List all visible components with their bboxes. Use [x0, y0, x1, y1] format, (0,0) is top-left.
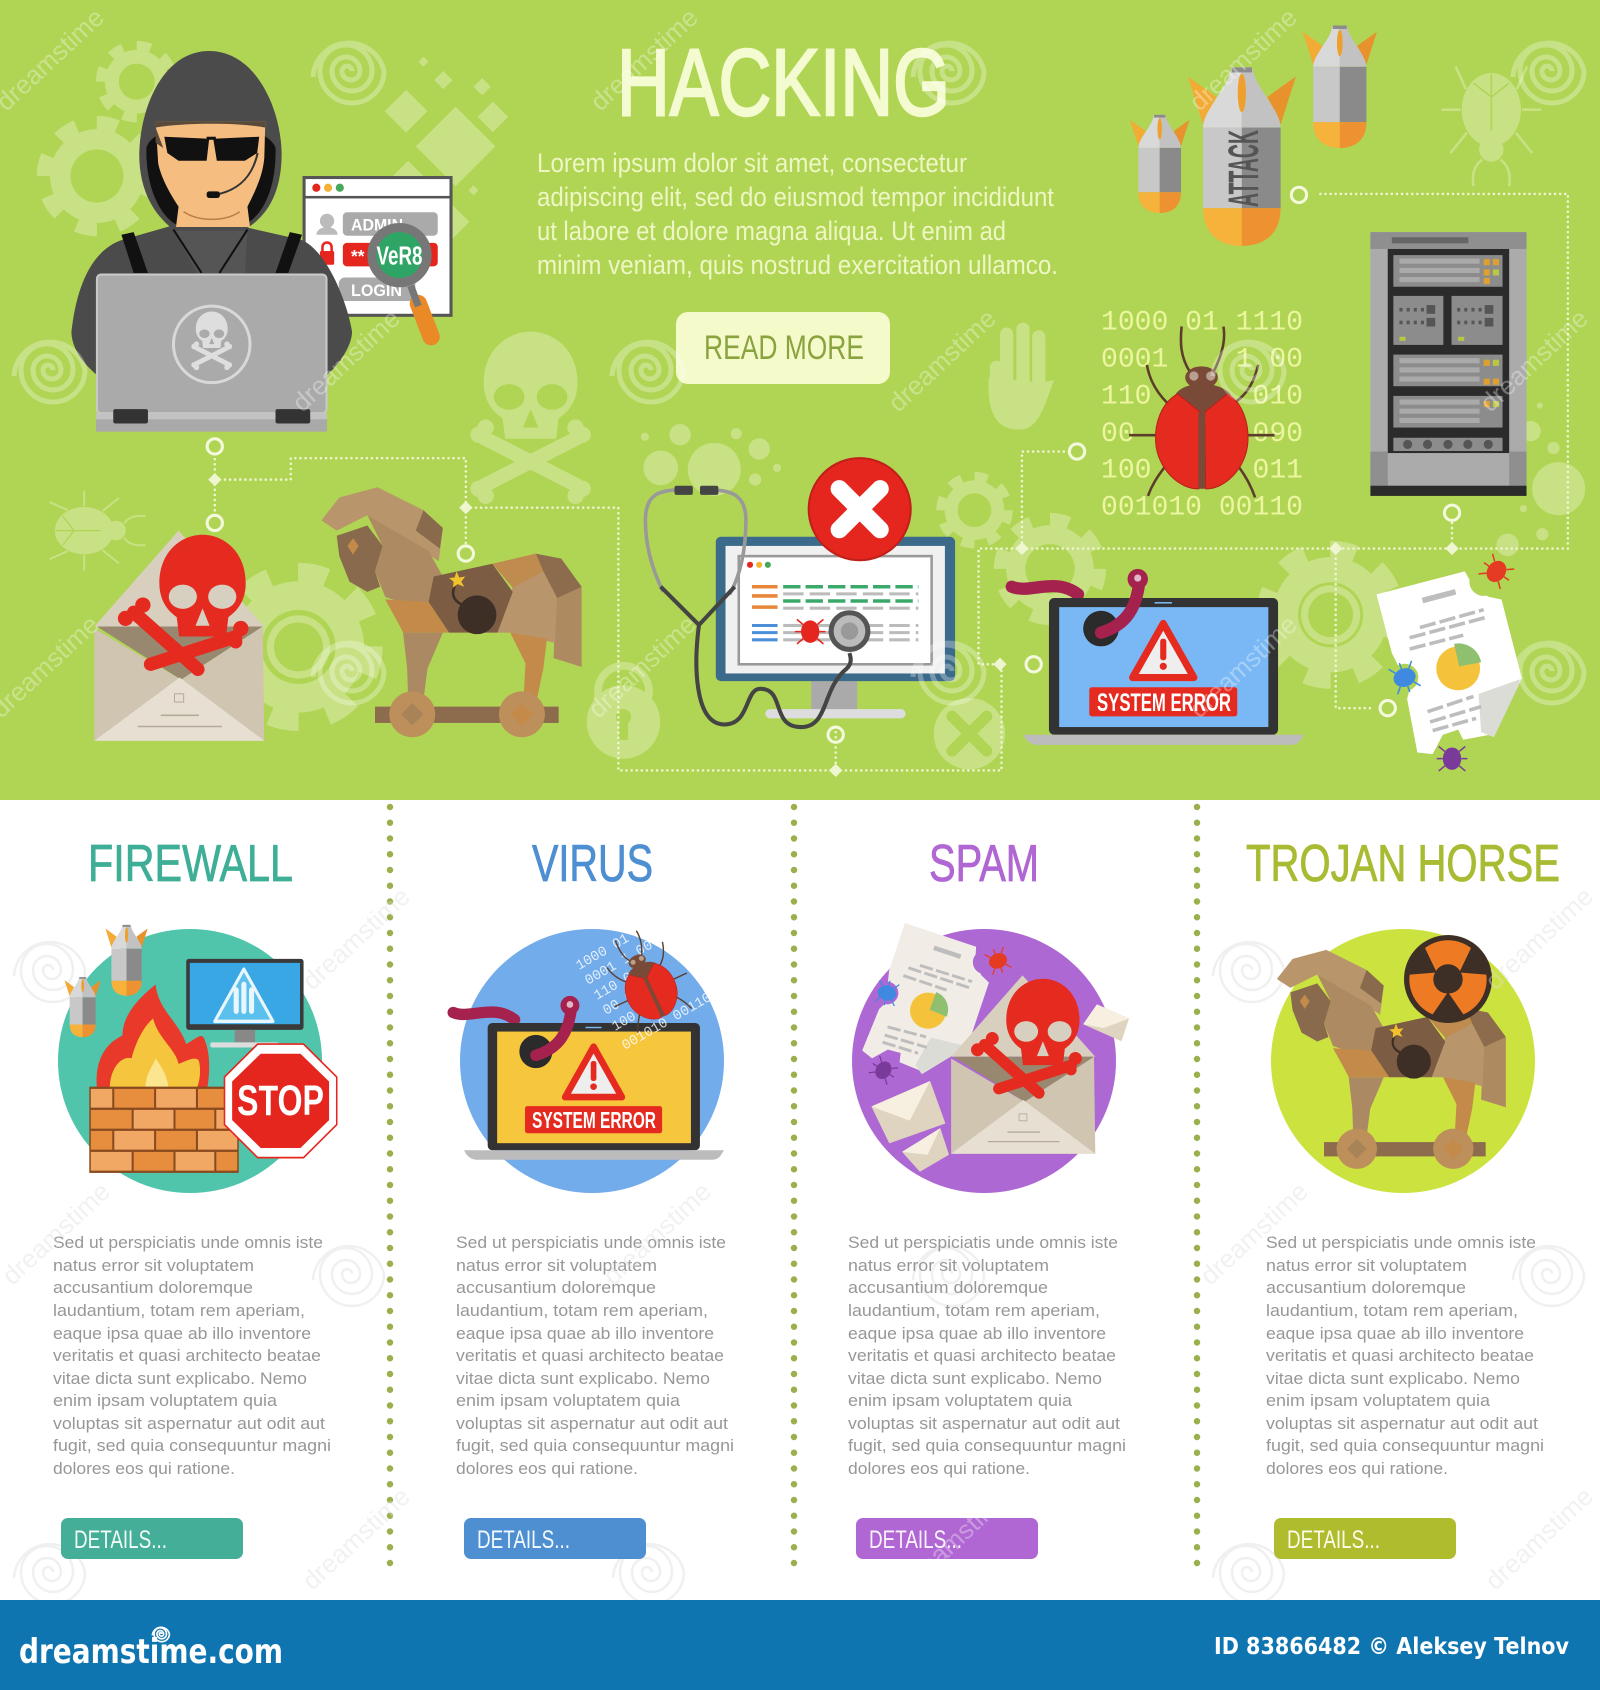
text: spam description: enim ipsam voluptatem quia	[848, 1391, 1073, 1410]
icon: firewall illustration	[65, 925, 337, 1173]
illustration: bombs	[1130, 26, 1377, 246]
text: firewall description: accusantium doloremque	[53, 1278, 253, 1297]
text: system error label: SYSTEM ERROR	[1097, 689, 1231, 717]
illustration: server rack	[1370, 232, 1527, 496]
icon: trojan circle	[1271, 929, 1535, 1193]
button: trojan details	[1274, 1518, 1456, 1559]
text: trojan description: accusantium doloremque	[1266, 1278, 1466, 1297]
icon: ladybug	[589, 919, 701, 1038]
text: virus description: enim ipsam voluptatem quia	[456, 1391, 681, 1410]
watermark text on white: dreamstime	[1194, 1176, 1314, 1291]
watermark text on green: dreamstime	[582, 609, 702, 724]
icon: infected document	[825, 894, 1024, 1111]
text: spam description: fugit, sed quia consequuntur magni	[848, 1436, 1126, 1455]
text: spam description: laudantium, totam rem aperiam,	[848, 1301, 1100, 1320]
text: trojan description	[1266, 1233, 1544, 1478]
background decorations: gears, diamonds, skull, bubbles	[45, 47, 1585, 769]
text: trojan description: laudantium, totam rem aperiam,	[1266, 1301, 1518, 1320]
heading: firewall: FIREWALL	[88, 835, 293, 893]
text: trojan description: voluptas sit aspernatur aut odit aut	[1266, 1414, 1538, 1433]
icon: binary text: 0001 1 00	[582, 938, 656, 989]
text: spam description: dolores eos qui ratione.	[848, 1459, 1030, 1478]
icon: small envelopes	[871, 1004, 1129, 1172]
text: trojan description: Sed ut perspiciatis unde omnis iste	[1266, 1233, 1536, 1252]
panel: trojan horse column	[1246, 835, 1560, 1559]
button: firewall details	[61, 1518, 243, 1559]
text: firewall description: laudantium, totam rem aperiam,	[53, 1301, 305, 1320]
icon: binary text	[574, 910, 715, 1054]
dotted connector lines with nodes	[207, 187, 1568, 777]
panel: green hacking header	[0, 0, 1600, 800]
text: firewall description: Sed ut perspiciatis unde omnis iste	[53, 1233, 323, 1252]
text: virus description	[456, 1233, 734, 1478]
text: firewall description: vitae dicta sunt explicabo. Nemo	[53, 1369, 307, 1388]
watermark text on white: dreamstime	[296, 881, 416, 996]
illustration: infected document	[1377, 553, 1522, 772]
watermark text on green: dreamstime	[584, 2, 704, 117]
watermark text on green: dreamstime	[286, 303, 406, 418]
binary code with ladybug: 1000 01 1110	[1101, 308, 1303, 339]
icon: skull email	[951, 975, 1095, 1154]
icon: binary text: 1000 01 1110	[574, 910, 669, 974]
watermark swirls on white	[14, 942, 1584, 1604]
illustration: login window with magnifier: VeR8	[377, 242, 422, 270]
watermark text on green: dreamstime	[1183, 609, 1303, 724]
text: firewall description: eaque ipsa quae ab illo inventore	[53, 1324, 311, 1343]
intro paragraph: ut labore et dolore magna aliqua. Ut enim ad	[537, 216, 1006, 246]
text: trojan description: veritatis et quasi architecto beatae	[1266, 1346, 1534, 1365]
intro paragraph: minim veniam, quis nostrud exercitation ullamco.	[537, 250, 1058, 280]
illustration: login window with magnifier	[304, 178, 451, 337]
binary code with ladybug: 00 090	[1101, 419, 1303, 450]
button: virus details	[464, 1518, 646, 1559]
text: virus description: dolores eos qui ratione.	[456, 1459, 638, 1478]
intro paragraph	[537, 148, 1058, 280]
text: firewall description	[53, 1233, 331, 1478]
text: virus description: Sed ut perspiciatis unde omnis iste	[456, 1233, 726, 1252]
text: firewall description: natus error sit voluptatem	[53, 1256, 254, 1275]
panel: spam column	[825, 835, 1129, 1559]
text: firewall description: voluptas sit aspernatur aut odit aut	[53, 1414, 325, 1433]
watermark text on green	[0, 2, 1594, 724]
text: virus description: fugit, sed quia consequuntur magni	[456, 1436, 734, 1455]
button: spam details: DETAILS...	[869, 1526, 962, 1554]
binary code with ladybug	[1101, 308, 1303, 523]
text: trojan description: natus error sit voluptatem	[1266, 1256, 1467, 1275]
title: HACKING	[617, 30, 950, 136]
icon: spam circle	[852, 929, 1116, 1193]
footer band	[0, 1600, 1600, 1690]
illustration: login window with magnifier: LOGIN	[351, 282, 402, 300]
read more button	[676, 312, 890, 384]
column separators	[390, 807, 1197, 1564]
binary code with ladybug: 001010 00110	[1101, 492, 1303, 523]
button: firewall details: DETAILS...	[74, 1526, 167, 1554]
icon: trojan horse	[1277, 950, 1506, 1169]
button: spam details	[856, 1518, 1038, 1559]
illustration: login window with magnifier: ADMIN	[351, 217, 403, 235]
illustration: trojan horse	[321, 487, 582, 737]
text: virus description: veritatis et quasi architecto beatae	[456, 1346, 724, 1365]
illustration: skull email	[94, 531, 264, 741]
text: spam description: natus error sit voluptatem	[848, 1256, 1049, 1275]
intro paragraph: Lorem ipsum dolor sit amet, consectetur	[537, 148, 967, 178]
icon: virus circle	[460, 929, 724, 1193]
text: virus system error label: SYSTEM ERROR	[532, 1107, 656, 1133]
icon: binary text: 110 010	[592, 961, 650, 1004]
watermark text on white: dreamstime	[597, 1176, 717, 1291]
text: firewall description: veritatis et quasi architecto beatae	[53, 1346, 321, 1365]
text: trojan description: dolores eos qui ratione.	[1266, 1459, 1448, 1478]
watermark text on white	[0, 881, 1599, 1596]
icon: binary text: 00 000	[600, 980, 652, 1019]
text: virus description: voluptas sit aspernatur aut odit aut	[456, 1414, 728, 1433]
icon: radiation badge	[1403, 935, 1493, 1023]
read more button: READ MORE	[704, 329, 864, 367]
binary code with ladybug: 110 010	[1101, 382, 1303, 413]
text: firewall description: enim ipsam voluptatem quia	[53, 1391, 278, 1410]
text: spam description: veritatis et quasi architecto beatae	[848, 1346, 1116, 1365]
heading: virus: VIRUS	[532, 835, 653, 893]
text: virus description: natus error sit voluptatem	[456, 1256, 657, 1275]
icon: firewall circle	[58, 929, 322, 1193]
icon: binary text: 001010 00110	[620, 990, 715, 1054]
text: stop sign: STOP	[237, 1077, 324, 1125]
watermark text on white: dreamstime	[1479, 1481, 1599, 1596]
watermark text on green: dreamstime	[1474, 303, 1594, 418]
illustration: hooded hacker with laptop	[71, 51, 352, 432]
watermark text on white: dreamstime	[296, 1481, 416, 1596]
binary code with ladybug: 100 011	[1101, 456, 1303, 487]
text: trojan description: vitae dicta sunt explicabo. Nemo	[1266, 1369, 1520, 1388]
icon: binary text: 100 011	[610, 992, 668, 1035]
text: virus description: laudantium, totam rem aperiam,	[456, 1301, 708, 1320]
text: trojan description: eaque ipsa quae ab illo inventore	[1266, 1324, 1524, 1343]
text: spam description	[848, 1233, 1126, 1478]
illustration: laptop with system error	[1012, 569, 1304, 745]
watermark text on white: dreamstime	[896, 1481, 1016, 1596]
watermark swirls on green	[14, 43, 1584, 703]
illustration: monitor with stethoscope and error badge	[645, 458, 955, 727]
watermark text on green: dreamstime	[1183, 2, 1303, 117]
text: virus description: vitae dicta sunt explicabo. Nemo	[456, 1369, 710, 1388]
text: virus description: eaque ipsa quae ab illo inventore	[456, 1324, 714, 1343]
text: virus description: accusantium doloremque	[456, 1278, 656, 1297]
intro paragraph: adipiscing elit, sed do eiusmod tempor incididunt	[537, 182, 1054, 212]
panel: virus column	[453, 835, 734, 1559]
footer credit: ID 83866482 © Aleksey Telnov	[1214, 1634, 1569, 1660]
watermark text on green: dreamstime	[882, 303, 1002, 418]
illustration: login window with magnifier: **	[351, 246, 365, 266]
text: firewall description: fugit, sed quia consequuntur magni	[53, 1436, 331, 1455]
footer logo: dreamstime.com	[19, 1632, 283, 1672]
text: ATTACK	[1220, 130, 1268, 207]
text: spam description: eaque ipsa quae ab illo inventore	[848, 1324, 1106, 1343]
text: firewall description: dolores eos qui ratione.	[53, 1459, 235, 1478]
text: trojan description: fugit, sed quia consequuntur magni	[1266, 1436, 1544, 1455]
text: trojan description: enim ipsam voluptatem quia	[1266, 1391, 1491, 1410]
binary code with ladybug: 0001 1 00	[1101, 344, 1303, 375]
panel: firewall column	[53, 835, 337, 1559]
text: spam description: Sed ut perspiciatis unde omnis iste	[848, 1233, 1118, 1252]
panel: white columns background	[0, 800, 1600, 1600]
button: trojan details: DETAILS...	[1287, 1526, 1380, 1554]
icon: laptop with worm	[453, 996, 724, 1160]
text: spam description: voluptas sit aspernatur aut odit aut	[848, 1414, 1120, 1433]
heading: spam: SPAM	[929, 835, 1039, 893]
text: spam description: accusantium doloremque	[848, 1278, 1048, 1297]
watermark text on white: dreamstime	[1479, 881, 1599, 996]
text: spam description: vitae dicta sunt explicabo. Nemo	[848, 1369, 1102, 1388]
button: virus details: DETAILS...	[477, 1526, 570, 1554]
